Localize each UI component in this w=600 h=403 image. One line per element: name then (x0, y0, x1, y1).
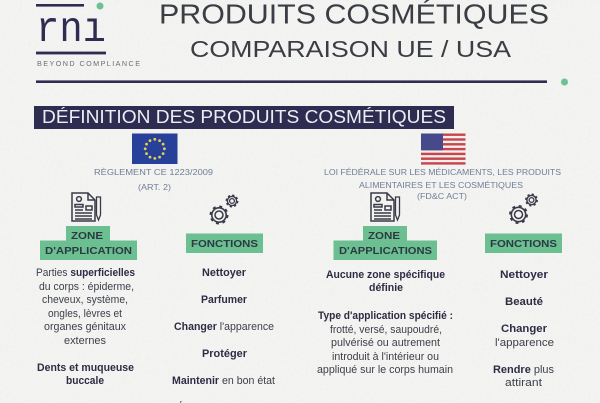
USA functions text: Beauté (505, 296, 543, 308)
title: COMPARAISON UE / USA (190, 36, 511, 62)
header rule with green dot (36, 78, 568, 86)
USA law reference (324, 168, 561, 201)
icon: USA flag (421, 134, 466, 165)
icon: USA gears (510, 194, 537, 223)
USA zone label (334, 226, 437, 260)
EU zone text: cheveux, système, (42, 294, 128, 306)
icon: EU gears (210, 195, 238, 224)
EU zone label (40, 226, 137, 260)
title (159, 0, 549, 62)
EU functions text: Maintenir en bon état (172, 375, 275, 387)
USA zone text: Aucune zone spécifique (326, 269, 445, 281)
USA zone text (317, 269, 453, 376)
USA functions text: l'apparence (495, 337, 554, 349)
EU zone text (36, 267, 135, 387)
EU functions label (186, 234, 263, 253)
EU zone text: ongles, lèvres et (48, 308, 122, 320)
logo: rni (36, 2, 140, 68)
USA zone text: introduit à l'intérieur ou (332, 351, 439, 363)
USA zone text: définie (369, 282, 403, 294)
USA zone text: Type d'application spécifié : (318, 310, 453, 322)
EU functions text (172, 267, 275, 403)
logo: rni: rni (36, 5, 106, 54)
USA law reference: LOI FÉDÉRALE SUR LES MÉDICAMENTS, LES PRODUITS (324, 168, 561, 177)
icon: USA document (371, 193, 400, 221)
EU regulation reference: (ART. 2) (138, 183, 171, 192)
USA functions label (485, 234, 562, 253)
section heading banner: DÉFINITION DES PRODUITS COSMÉTIQUES (42, 107, 446, 127)
EU zone text: du corps : épiderme, (39, 281, 134, 293)
USA zone label: D'APPLICATIONS (339, 245, 432, 257)
EU functions text: Changer l'apparence (174, 321, 274, 333)
USA zone text: pulvérisé ou autrement (331, 337, 440, 349)
USA zone text: frotté, versé, saupoudré, (330, 324, 442, 336)
USA law reference: (FD&C ACT) (417, 192, 467, 201)
EU regulation reference: RÈGLEMENT CE 1223/2009 (94, 168, 214, 177)
icon: EU flag (132, 134, 178, 164)
EU functions label: FONCTIONS (191, 238, 258, 250)
EU functions text: Protéger (202, 348, 248, 360)
USA zone label: ZONE (368, 230, 400, 242)
EU functions text: Parfumer (201, 294, 248, 306)
EU zone label: D'APPLICATION (45, 245, 132, 257)
EU functions text: Nettoyer (202, 267, 247, 279)
USA functions text: attirant (505, 377, 542, 389)
USA functions text: Changer (501, 323, 548, 335)
EU zone text: organes génitaux (44, 321, 127, 333)
EU zone text: Dents et muqueuse (37, 362, 134, 374)
USA functions text: Rendre plus (493, 364, 555, 376)
EU regulation reference (94, 168, 214, 192)
USA functions text: Nettoyer (500, 269, 549, 281)
EU zone text: Parties superficielles (36, 267, 135, 279)
EU zone text: buccale (66, 375, 104, 387)
USA functions text (493, 269, 555, 389)
USA law reference: ALIMENTAIRES ET LES COSMÉTIQUES (359, 181, 523, 190)
EU zone text: externes (64, 335, 107, 347)
icon: EU document (72, 193, 100, 221)
USA zone text: appliqué sur le corps humain (317, 364, 453, 376)
EU zone label: ZONE (71, 230, 103, 242)
logo: rni: BEYOND COMPLIANCE (37, 59, 140, 68)
USA functions label: FONCTIONS (490, 238, 557, 250)
